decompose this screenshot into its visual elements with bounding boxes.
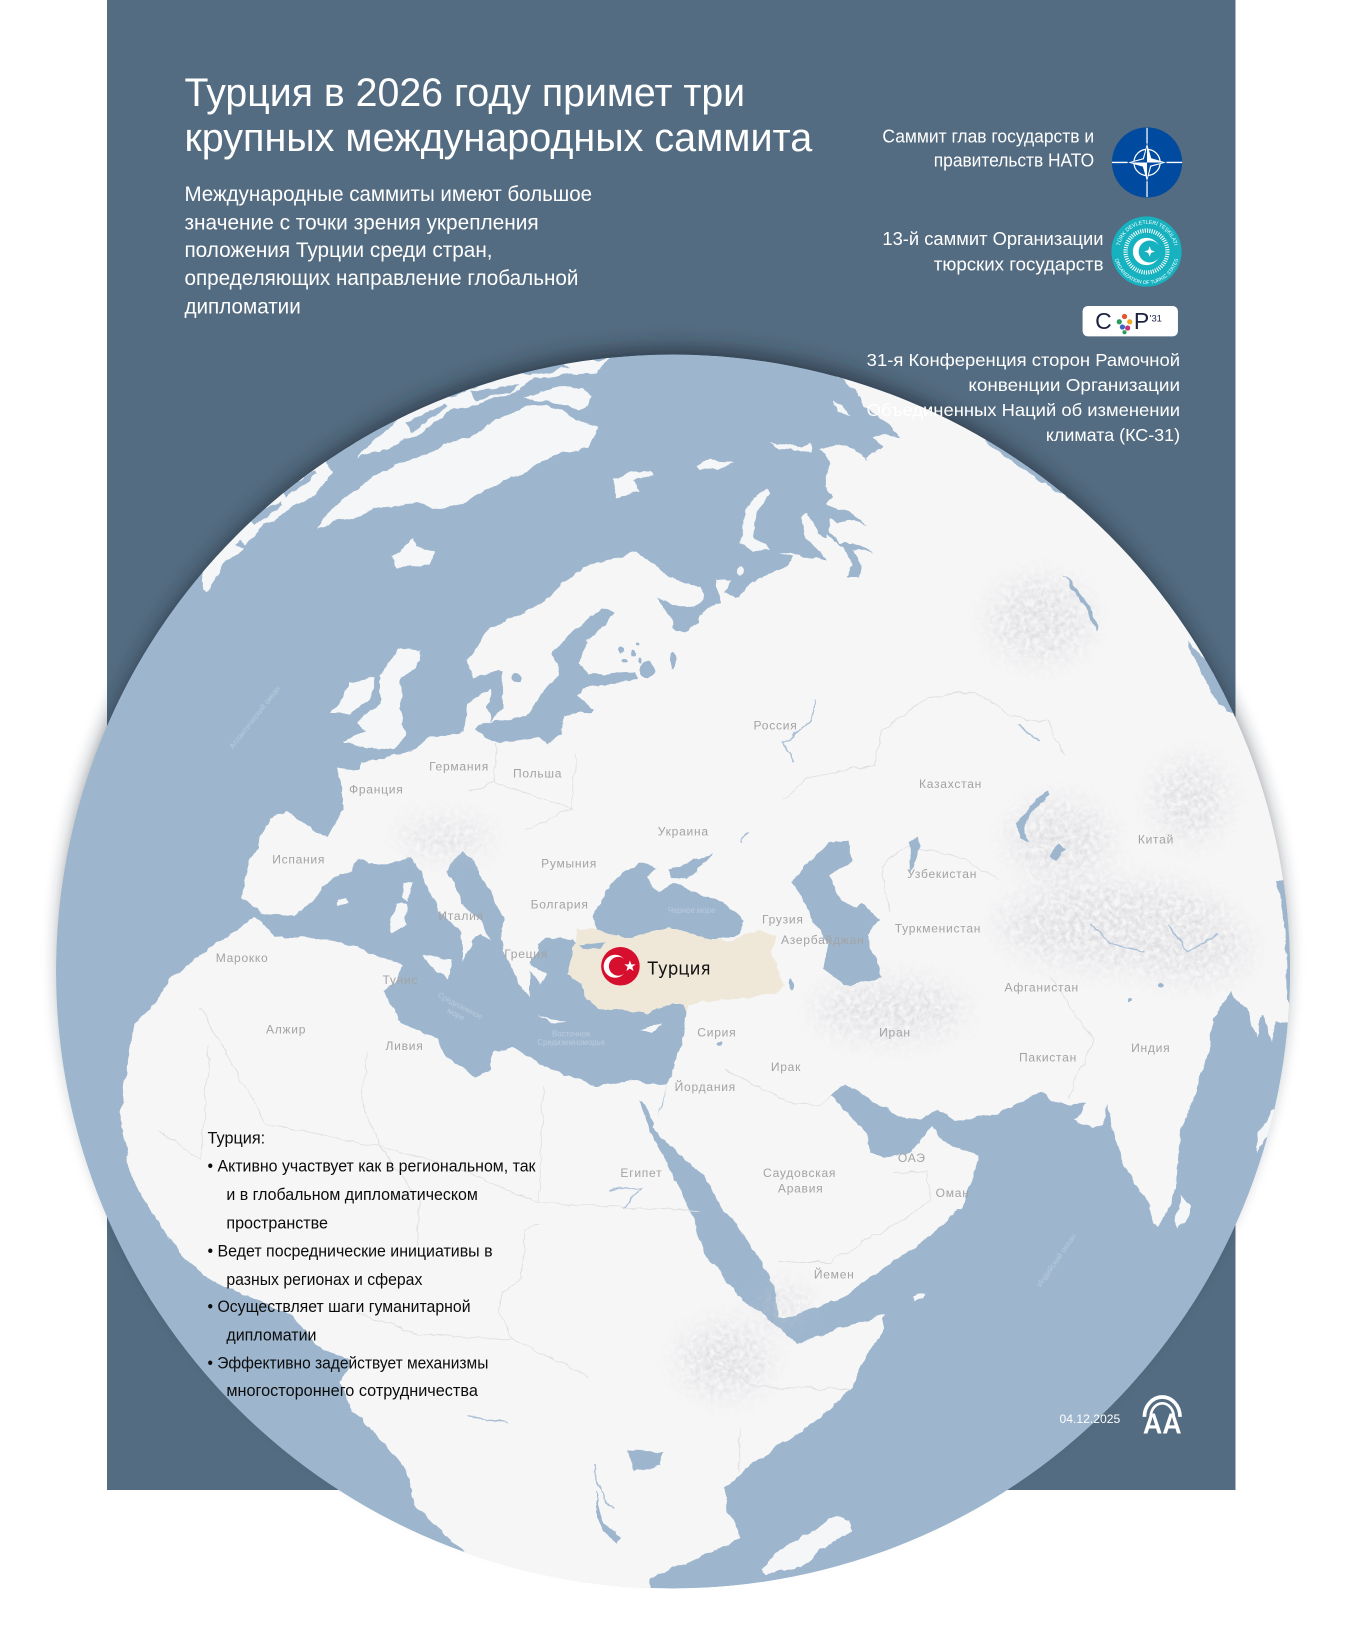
Turkey bullet list: • Эффективно задействует механизмы — [208, 1354, 488, 1373]
country labels: Испания — [272, 853, 325, 867]
country labels: Иран — [879, 1025, 911, 1039]
sea labels: Восточное — [552, 1029, 591, 1038]
country labels: Украина — [658, 824, 709, 838]
country labels: Туркменистан — [895, 922, 981, 936]
country labels: Польша — [513, 767, 562, 781]
OTS summit label — [882, 228, 1104, 274]
country labels: Саудовская — [763, 1166, 836, 1180]
Turkey bullet list: Турция: — [208, 1128, 265, 1147]
title — [184, 71, 813, 160]
Issyk-Kul — [1050, 843, 1066, 862]
sea labels: Черное море — [668, 906, 716, 915]
NATO summit label: правительств НАТО — [934, 150, 1094, 171]
Africa landmass — [121, 916, 885, 1640]
country labels: Сирия — [697, 1025, 736, 1039]
COP31 label — [867, 350, 1180, 445]
icon: Organization of Turkic States logo: TÜRK DEVLETLERİ TEŞKİLATI — [1116, 220, 1178, 246]
country labels: Россия — [754, 718, 797, 732]
country labels: Египет — [620, 1166, 662, 1180]
country labels — [216, 718, 1174, 1282]
rivers — [469, 700, 1219, 1509]
COP31 label: Объединенных Наций об изменении — [867, 400, 1180, 420]
Sea of Azov — [668, 853, 713, 878]
Turkey bullet list — [208, 1128, 536, 1400]
country labels: Болгария — [531, 898, 589, 912]
country labels: Италия — [438, 909, 484, 923]
subtitle text block: положения Турции среди стран, — [184, 239, 493, 262]
Lake Tanganyika — [596, 1492, 620, 1544]
Baltic Sea — [475, 608, 637, 743]
COP31 label: конвенции Организации — [968, 375, 1180, 395]
Turkey bullet list: • Осуществляет шаги гуманитарной — [208, 1297, 471, 1316]
country labels: Йемен — [814, 1267, 855, 1282]
ocean — [56, 354, 1290, 1588]
Turkey bullet list: дипломатии — [226, 1325, 316, 1344]
land and water geography — [120, 358, 1290, 1588]
country labels: Алжир — [266, 1022, 306, 1036]
country borders — [158, 691, 1093, 1471]
country labels: Грузия — [762, 912, 804, 926]
Turkey marker — [601, 947, 711, 986]
mountain terrain texture — [400, 580, 1250, 1395]
globe shadow — [63, 348, 1283, 1568]
country labels: Марокко — [216, 951, 268, 965]
icon: AA logo: AA — [1143, 1408, 1182, 1440]
Aral Sea — [909, 835, 919, 872]
NATO summit label: Саммит глав государств и — [882, 126, 1094, 147]
sea labels: море — [446, 1006, 467, 1023]
sea labels: Средиземное — [436, 990, 485, 1022]
Turkey bullet list: • Ведет посреднические инициативы в — [208, 1242, 493, 1261]
country labels: Узбекистан — [907, 867, 977, 881]
subtitle text block: значение с точки зрения укрепления — [184, 212, 539, 235]
subtitle text block: Международные саммиты имеют большое — [184, 183, 592, 206]
country labels: Ирак — [771, 1060, 801, 1074]
country labels: ОАЭ — [898, 1151, 926, 1165]
country labels: Йордания — [675, 1079, 736, 1094]
title: крупных международных саммита — [184, 116, 813, 160]
OTS summit label: тюрских государств — [934, 253, 1104, 274]
Turkey bullet list: многостороннего сотрудничества — [226, 1381, 479, 1400]
icon: COP31 logo: '31 — [1150, 313, 1162, 324]
sea labels — [227, 684, 1078, 1289]
country labels: Франция — [349, 782, 403, 796]
country labels: Аравия — [778, 1182, 823, 1196]
Turkey bullet list: разных регионах и сферах — [226, 1270, 423, 1289]
icon: NATO logo — [1112, 127, 1182, 198]
Lake Balkhash — [1015, 790, 1050, 842]
icon: Organization of Turkic States logo — [1111, 216, 1182, 287]
subtitle text block: определяющих направление глобальной — [184, 267, 578, 290]
background panel — [107, 0, 1236, 1490]
Turkey highlighted — [568, 928, 785, 1013]
country labels: Азербайджан — [781, 933, 864, 947]
country labels: Тунис — [382, 973, 418, 987]
inland seas, lakes and polar rim water — [475, 428, 1310, 1544]
icon: Organization of Turkic States logo: ORGANIZATION OF TURKIC STATES — [1115, 258, 1178, 284]
icon: COP31 logo — [1083, 306, 1178, 336]
OTS summit label: 13-й саммит Организации — [882, 228, 1104, 249]
blue slits in arctic archipelago — [250, 350, 620, 526]
country labels: Пакистан — [1019, 1051, 1077, 1065]
label: Turkey: Турция — [647, 959, 711, 980]
Black Sea — [593, 863, 743, 940]
country labels: Индия — [1131, 1041, 1170, 1055]
NATO summit label — [882, 126, 1094, 171]
country labels: Казахстан — [919, 777, 982, 791]
title: Турция в 2026 году примет три — [184, 71, 745, 115]
sea labels: Атлантический океан — [227, 684, 282, 751]
globe map — [56, 354, 1290, 1588]
country labels: Афганистан — [1005, 980, 1079, 994]
sea labels: Средиземноморье — [537, 1038, 606, 1047]
country labels: Ливия — [386, 1039, 424, 1053]
country labels: Румыния — [541, 857, 597, 871]
scattered lakes — [511, 673, 523, 681]
country labels: Оман — [936, 1186, 970, 1200]
Ob Gulf — [826, 530, 874, 578]
icon: Turkish flag — [601, 947, 640, 986]
Marmara Sea — [580, 942, 607, 949]
subtitle text block: дипломатии — [184, 295, 301, 318]
rim waters — [985, 440, 1071, 500]
Caspian Sea — [791, 841, 884, 986]
Turkey bullet list: и в глобальном дипломатическом — [226, 1185, 478, 1204]
sea labels: Индийский океан — [1035, 1232, 1078, 1289]
Turkey bullet list: • Активно участвует как в региональном, так — [208, 1157, 536, 1176]
arctic islands, Greenland, Britain and Mediterranean islands — [150, 330, 1285, 1574]
Lake Victoria — [628, 1451, 663, 1471]
Lake Baikal — [1064, 574, 1098, 632]
Eurasia landmass — [241, 376, 1289, 1318]
infographic content layer — [184, 71, 1182, 1440]
country labels: Китай — [1138, 833, 1174, 847]
icon: COP31 logo: C — [1095, 308, 1112, 334]
subtitle text block — [184, 183, 592, 318]
country labels: Греция — [504, 947, 548, 961]
COP31 label: 31-я Конференция сторон Рамочной — [867, 350, 1180, 370]
Turkey bullet list: пространстве — [226, 1213, 328, 1232]
country labels: Германия — [429, 759, 489, 773]
icon: COP31 logo: P — [1134, 308, 1149, 334]
date: 04.12.2025 — [1060, 1412, 1121, 1426]
COP31 label: климата (КС-31) — [1046, 425, 1180, 445]
Gyda inlet — [827, 505, 868, 525]
